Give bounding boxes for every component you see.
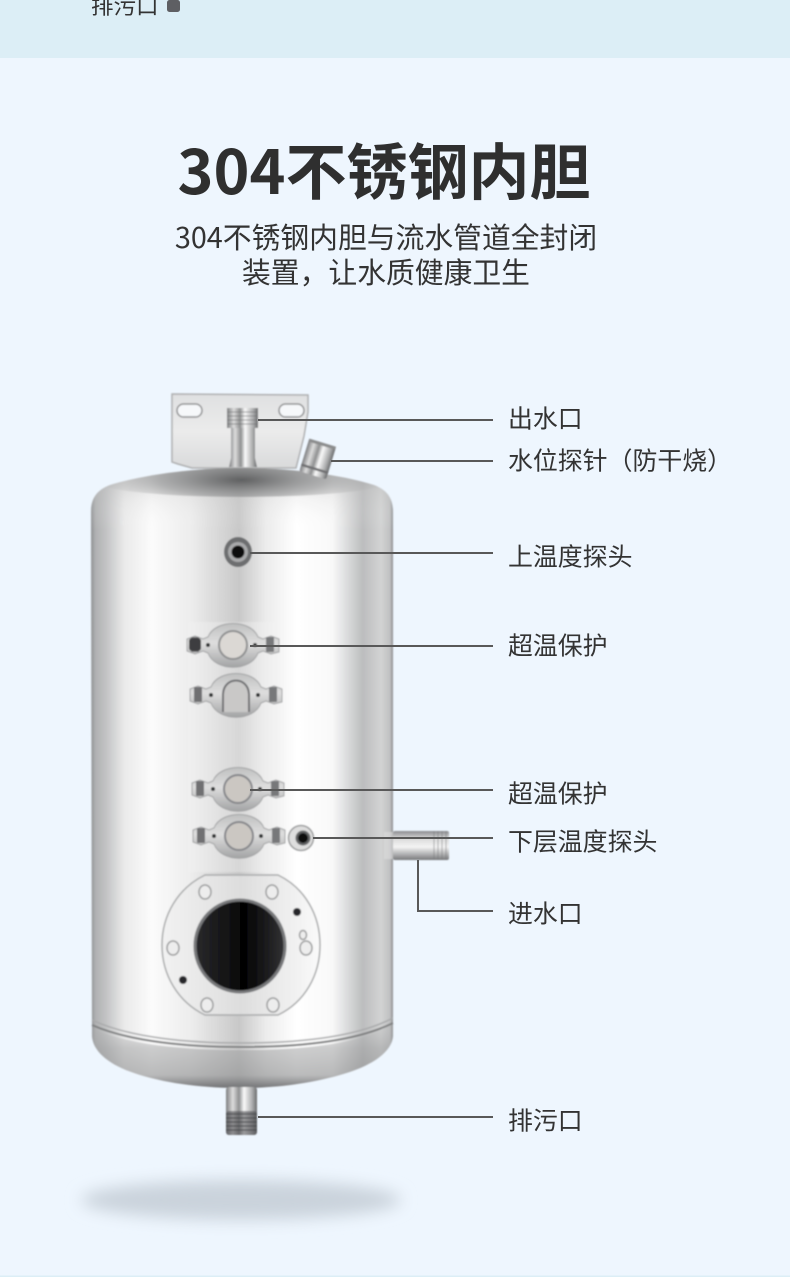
callout labels: 出水口 <box>508 400 583 436</box>
drain pipe <box>226 1087 257 1135</box>
callout labels: 进水口 <box>508 894 583 930</box>
over-temperature clamp 1 <box>187 624 279 667</box>
callout labels: 排污口 <box>508 1102 583 1138</box>
subtitle <box>175 216 597 292</box>
lower temperature probe port <box>288 826 314 850</box>
icon: small drain fitting <box>167 0 180 12</box>
callout labels: 下层温度探头 <box>508 822 657 858</box>
callout labels <box>508 400 732 1138</box>
leader lines <box>250 420 493 1117</box>
bottom edge strip <box>0 1276 790 1277</box>
floor shadow <box>81 1180 401 1220</box>
flange opening <box>195 900 285 992</box>
tank body <box>91 468 393 1088</box>
water outlet pipe <box>227 408 258 467</box>
subtitle: 304不锈钢内胆与流水管道全封闭 <box>175 216 597 257</box>
pale mounting patch <box>188 622 280 872</box>
title: 304不锈钢内胆 <box>178 123 590 212</box>
stainless steel tank <box>91 394 449 1135</box>
over-temperature clamp 2 <box>192 768 284 811</box>
weld seam <box>92 1018 393 1047</box>
over-temperature clamp 3 <box>193 814 285 858</box>
blank clamp with U bracket <box>190 674 282 717</box>
callout labels: 上温度探头 <box>508 538 632 574</box>
callout labels: 超温保护 <box>508 626 608 662</box>
callout labels: 水位探针（防干烧） <box>508 442 732 478</box>
water level probe <box>299 439 336 479</box>
subtitle: 装置，让水质健康卫生 <box>242 251 530 292</box>
base shading <box>92 1024 393 1088</box>
mounting bracket <box>172 394 308 468</box>
upper temperature probe port <box>224 537 252 567</box>
callout labels: 超温保护 <box>508 774 608 810</box>
dome shading <box>92 467 376 508</box>
top band <box>0 0 790 58</box>
water inlet pipe <box>384 831 449 860</box>
flange bolts <box>167 885 312 1012</box>
heating element flange <box>162 875 320 1015</box>
